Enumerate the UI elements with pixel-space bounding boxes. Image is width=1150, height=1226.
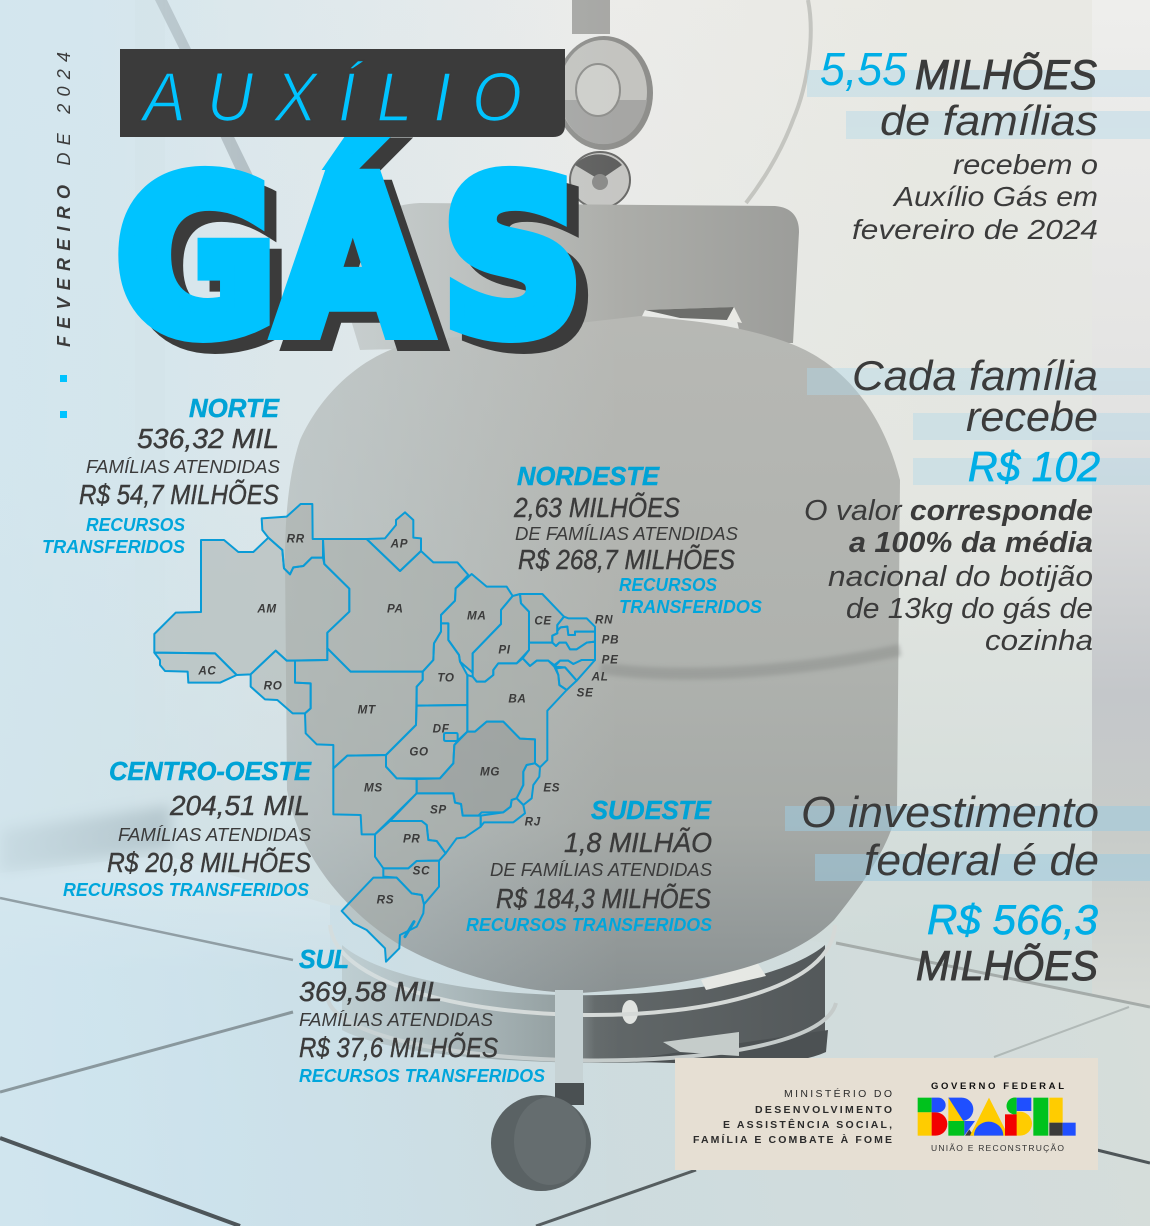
stat: families served: 5,55	[820, 43, 907, 95]
map of Brazil by state: AC	[197, 665, 217, 678]
floor tile joints	[0, 898, 1150, 1226]
map of Brazil by state: TO	[437, 672, 455, 685]
region: Centro-Oeste	[63, 756, 312, 900]
map of Brazil by state: MA	[467, 610, 486, 623]
region: Norte	[42, 393, 280, 557]
region: Nordeste: TRANSFERIDOS	[619, 597, 762, 617]
decorative cyan dots	[60, 375, 67, 418]
stat: federal investment	[801, 788, 1099, 989]
region: Nordeste	[513, 461, 762, 617]
map of Brazil by state: DF	[433, 723, 450, 736]
map of Brazil by state: MS	[364, 781, 383, 794]
ministry name: MINISTÉRIO DO	[784, 1087, 892, 1100]
stat: benefit value: recebe	[966, 393, 1098, 440]
region: Nordeste: RECURSOS	[619, 575, 717, 595]
stat: families served: recebem o	[953, 149, 1098, 180]
left colour wash over photo	[0, 0, 620, 1226]
title banner: AUXÍLIO: AUXÍLIO	[139, 59, 522, 137]
region: Nordeste: NORDESTE	[517, 461, 660, 491]
Governo Federal Brasil logo: UNIÃO E RECONSTRUÇÃO	[931, 1143, 1064, 1153]
region: Centro-Oeste: RECURSOS TRANSFERIDOS	[63, 880, 309, 900]
region: Sul	[299, 944, 545, 1086]
region: Centro-Oeste: 204,51 MIL	[169, 790, 310, 821]
region: Sudeste: SUDESTE	[591, 795, 712, 825]
map of Brazil by state: RJ	[525, 815, 541, 828]
map of Brazil by state: GO	[409, 746, 429, 759]
map of Brazil by state: SC	[413, 864, 430, 877]
map of Brazil by state: AP	[390, 537, 408, 550]
region: Centro-Oeste: FAMÍLIAS ATENDIDAS	[118, 825, 311, 845]
cylinder collar	[345, 203, 799, 350]
region: Centro-Oeste: R$ 20,8 MILHÕES	[107, 847, 311, 878]
map of Brazil by state: AL	[591, 671, 609, 684]
region: Sudeste: RECURSOS TRANSFERIDOS	[466, 915, 712, 935]
region: Sul: SUL	[299, 944, 349, 974]
map of Brazil by state: RN	[595, 613, 613, 626]
map of Brazil by state: PA	[387, 602, 404, 615]
cylinder leg	[555, 990, 583, 1085]
region: Norte: NORTE	[189, 393, 280, 423]
region: Norte: 536,32 MIL	[137, 423, 279, 454]
map of Brazil by state: RS	[377, 893, 394, 906]
stat: federal investment: MILHÕES	[916, 942, 1098, 989]
map of Brazil by state: SP	[430, 804, 447, 817]
map of Brazil by state: ES	[543, 781, 560, 794]
region: Norte: FAMÍLIAS ATENDIDAS	[86, 457, 280, 477]
vertical date label: FEVEREIRO DE 2024	[54, 52, 74, 347]
cylinder base band and rings	[328, 925, 836, 1065]
map of Brazil by state: PR	[403, 833, 421, 846]
ministry name	[693, 1087, 892, 1146]
region: Sudeste: 1,8 MILHÃO	[564, 827, 712, 858]
cylinder body	[285, 316, 900, 993]
region: Norte: TRANSFERIDOS	[42, 537, 185, 557]
map of Brazil by state: RR	[287, 533, 305, 546]
map of Brazil by state: PB	[602, 634, 619, 647]
stat: benefit value: de 13kg do gás de	[846, 593, 1093, 625]
map of Brazil by state: MT	[358, 703, 376, 716]
region: Sudeste	[466, 795, 712, 935]
map of Brazil by state: BA	[508, 693, 527, 706]
map of Brazil by state: PI	[498, 644, 511, 657]
stat: families served	[820, 43, 1098, 245]
highlight bands behind investment text	[785, 806, 1150, 881]
stat: benefit value: nacional do botijão	[828, 561, 1093, 593]
region: Sudeste: DE FAMÍLIAS ATENDIDAS	[490, 860, 712, 880]
gas regulator	[555, 0, 653, 208]
stat: benefit value: R$ 102	[968, 443, 1100, 490]
stat: families served: fevereiro de 2024	[852, 214, 1098, 245]
map of Brazil by state: SE	[577, 686, 594, 699]
Governo Federal Brasil logo: GOVERNO FEDERAL	[931, 1081, 1064, 1092]
region: Norte: R$ 54,7 MILHÕES	[79, 479, 279, 510]
ministry name: E ASSISTÊNCIA SOCIAL,	[723, 1118, 892, 1131]
map of Brazil by state: MG	[480, 765, 500, 778]
title word: GÁS with shadow: GÁS	[128, 145, 595, 394]
stat: benefit value	[804, 352, 1100, 657]
region: Nordeste: R$ 268,7 MILHÕES	[518, 544, 735, 575]
stat: families served: de famílias	[880, 97, 1098, 144]
region: Centro-Oeste: CENTRO-OESTE	[109, 756, 312, 786]
region: Sul: RECURSOS TRANSFERIDOS	[299, 1066, 545, 1086]
Governo Federal Brasil logo	[918, 1081, 1076, 1153]
title word: GÁS with shadow: GÁS	[116, 134, 583, 383]
footer panel: government logos	[675, 1058, 1098, 1170]
stat: federal investment: R$ 566,3	[927, 896, 1098, 943]
stat: benefit value: a 100% da média	[849, 527, 1093, 559]
map of Brazil by state	[154, 504, 619, 962]
ministry name: DESENVOLVIMENTO	[755, 1104, 892, 1116]
region: Nordeste: 2,63 MILHÕES	[513, 492, 680, 523]
region: Sul: FAMÍLIAS ATENDIDAS	[299, 1010, 493, 1030]
map of Brazil by state: AM	[256, 602, 277, 615]
wheel	[491, 1083, 591, 1191]
map of Brazil by state: RO	[264, 679, 282, 692]
stat: federal investment: O investimento	[801, 788, 1099, 837]
stat: benefit value: O valor corresponde	[804, 495, 1093, 527]
stat: families served: Auxílio Gás em	[892, 181, 1098, 212]
stat: benefit value: cozinha	[985, 625, 1093, 657]
stat: federal investment: federal é de	[864, 836, 1099, 885]
highlight bands behind right-column text	[807, 70, 1150, 485]
region: Sul: 369,58 MIL	[299, 976, 442, 1007]
ministry name: FAMÍLIA E COMBATE À FOME	[693, 1133, 892, 1146]
region: Nordeste: DE FAMÍLIAS ATENDIDAS	[515, 524, 738, 544]
regulator hose	[746, 0, 811, 203]
map of Brazil by state: PE	[602, 654, 619, 667]
stat: benefit value: Cada família	[852, 352, 1098, 399]
stat: families served: MILHÕES	[915, 51, 1097, 98]
region: Sul: R$ 37,6 MILHÕES	[299, 1032, 498, 1063]
map of Brazil by state: CE	[534, 615, 552, 628]
region: Sudeste: R$ 184,3 MILHÕES	[496, 883, 711, 914]
region: Norte: RECURSOS	[86, 515, 185, 535]
